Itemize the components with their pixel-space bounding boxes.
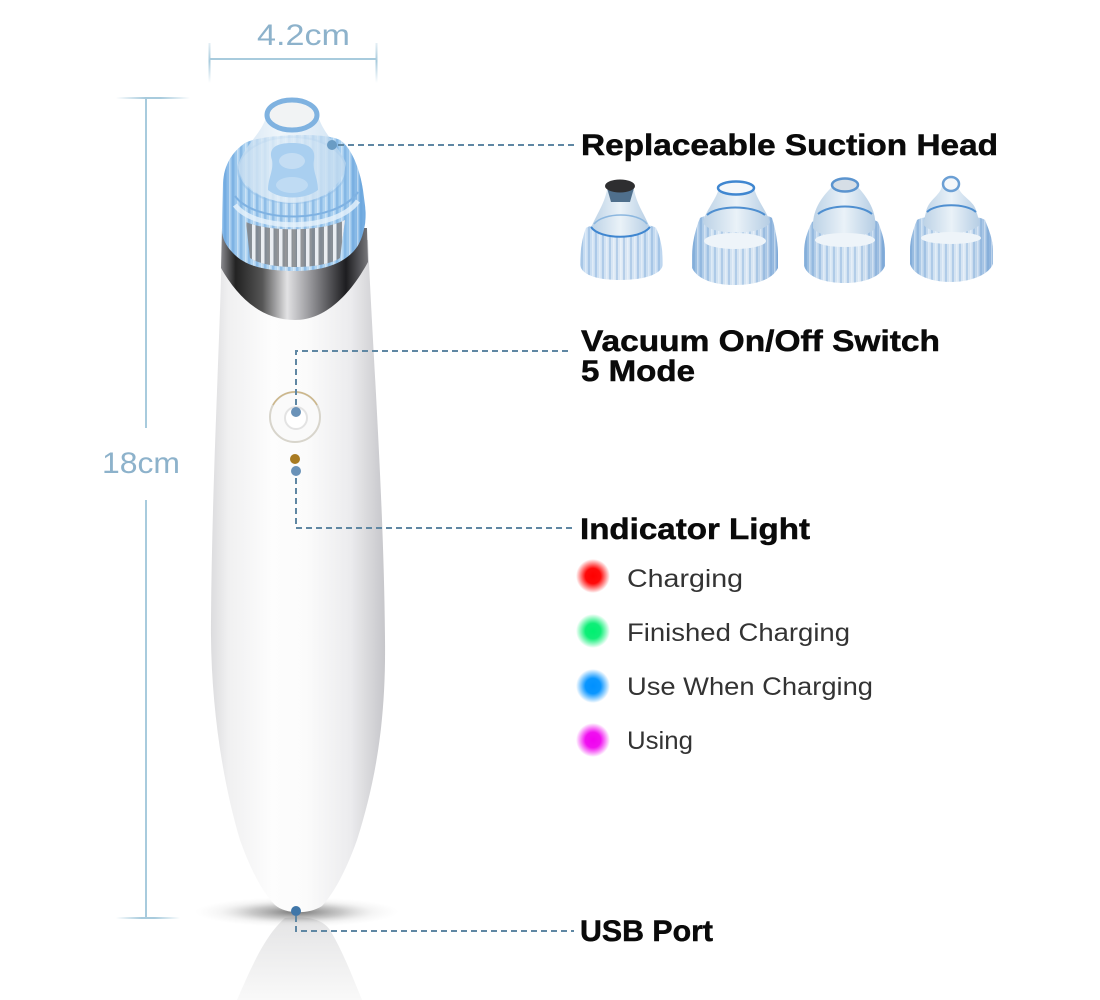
- suction head 3: [804, 178, 885, 283]
- indicator light lens: [290, 454, 300, 464]
- height dimension: 18cm: 18cm: [102, 447, 180, 480]
- legend: charging: Charging: [627, 565, 743, 593]
- legend: use when charging: [576, 669, 873, 703]
- power switch button: [270, 392, 320, 442]
- legend: finished charging: Finished Charging: [627, 619, 850, 647]
- heading: USB port: USB Port: [580, 915, 713, 948]
- suction head 1: [580, 180, 663, 280]
- device body: [211, 240, 385, 912]
- legend: using: Using: [627, 727, 693, 755]
- leader line: indicator: [291, 466, 572, 528]
- width dimension: 4.2cm: 4.2cm: [257, 19, 350, 52]
- legend: finished charging: [576, 614, 850, 648]
- metal band: [221, 228, 368, 320]
- transparent suction tip: [238, 100, 346, 203]
- heading: replaceable suction head: Replaceable Suction Head: [581, 129, 998, 162]
- blue collar: [222, 135, 366, 271]
- legend: charging: [576, 559, 743, 593]
- legend: using: [576, 723, 693, 757]
- heading: vacuum switch: [581, 325, 940, 388]
- heading: indicator light: Indicator Light: [580, 513, 810, 546]
- device reflection and shadow: [195, 897, 399, 1000]
- collar teeth: [246, 220, 345, 267]
- leader line: suction head: [327, 140, 578, 150]
- leader line: switch: [291, 351, 572, 417]
- leader line: USB port: [291, 906, 574, 931]
- device: blackhead vacuum: [211, 100, 385, 912]
- heading: vacuum switch: Vacuum On/Off Switch: [581, 325, 940, 358]
- suction head 2: [692, 182, 778, 285]
- legend: use when charging: Use When Charging: [627, 673, 873, 701]
- suction head 4: [910, 177, 993, 282]
- heading: vacuum switch: 5 Mode: [581, 355, 695, 388]
- inner nozzle: [268, 143, 318, 198]
